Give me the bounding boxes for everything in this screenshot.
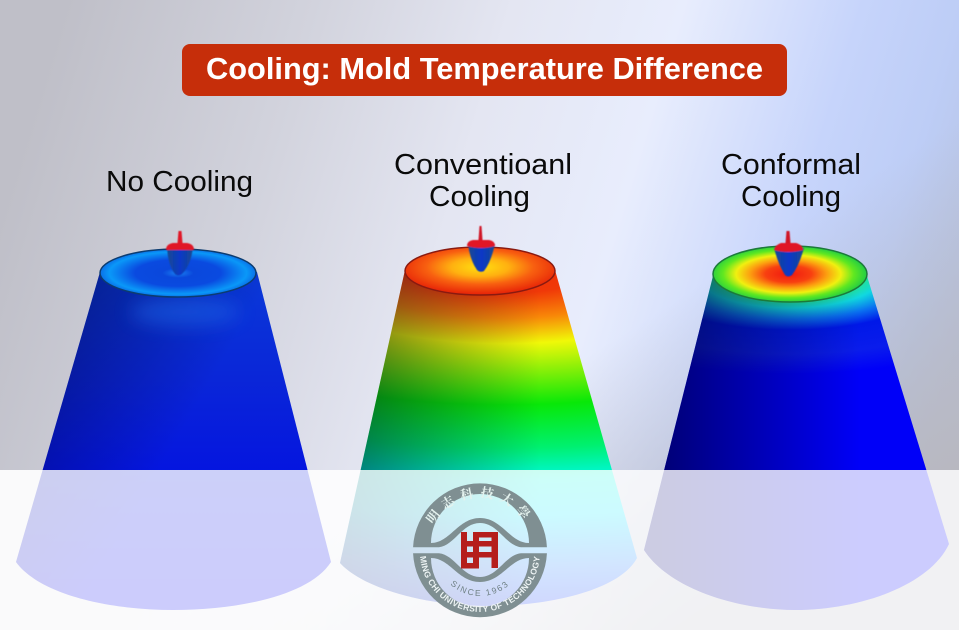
- sprue: conventional cooling: [467, 226, 495, 272]
- cone body: no cooling: [16, 272, 331, 610]
- label: Conventioanl Cooling: Conventioanl: [394, 149, 572, 181]
- logo upper ring: [413, 483, 547, 547]
- translucent lower band: [0, 470, 959, 630]
- logo lower ring: [413, 553, 547, 617]
- cone highlight: no cooling: [130, 298, 240, 326]
- logo red emblem: [461, 532, 498, 568]
- cone body: conventional cooling: [340, 270, 637, 606]
- top face: no cooling: [100, 249, 256, 297]
- label: Conventioanl Cooling: Cooling: [429, 181, 530, 213]
- label: Conformal Cooling: [721, 149, 861, 213]
- label: Conventioanl Cooling: [394, 149, 572, 213]
- sprue: conformal cooling: [774, 231, 804, 276]
- top face: conformal cooling: [713, 246, 867, 302]
- top face: conventional cooling: [405, 247, 555, 295]
- mold: conformal cooling: [644, 231, 949, 610]
- mold: conventional cooling: [340, 226, 637, 606]
- cone shading: conventional cooling: [340, 270, 637, 606]
- label: No Cooling: No Cooling: [106, 166, 253, 198]
- logo English name: MING CHI UNIVERSITY OF TECHNOLOGY: [420, 556, 540, 612]
- cone body: conformal cooling: [644, 276, 949, 610]
- mold: no cooling: [16, 231, 331, 610]
- cone shading: no cooling: [16, 272, 331, 610]
- title banner: Cooling: Mold Temperature Difference: [206, 51, 763, 86]
- title banner: [182, 44, 787, 96]
- cone shading: conformal cooling: [644, 276, 949, 610]
- logo Chinese name: 明志科技大學: [425, 486, 530, 524]
- label: Conformal Cooling: Conformal: [721, 149, 861, 181]
- logo since 1963: SINCE 1963: [451, 580, 508, 596]
- sprue: no cooling: [166, 231, 194, 276]
- logo: Ming Chi University of Technology: [413, 483, 547, 618]
- label: Conformal Cooling: Cooling: [741, 181, 841, 213]
